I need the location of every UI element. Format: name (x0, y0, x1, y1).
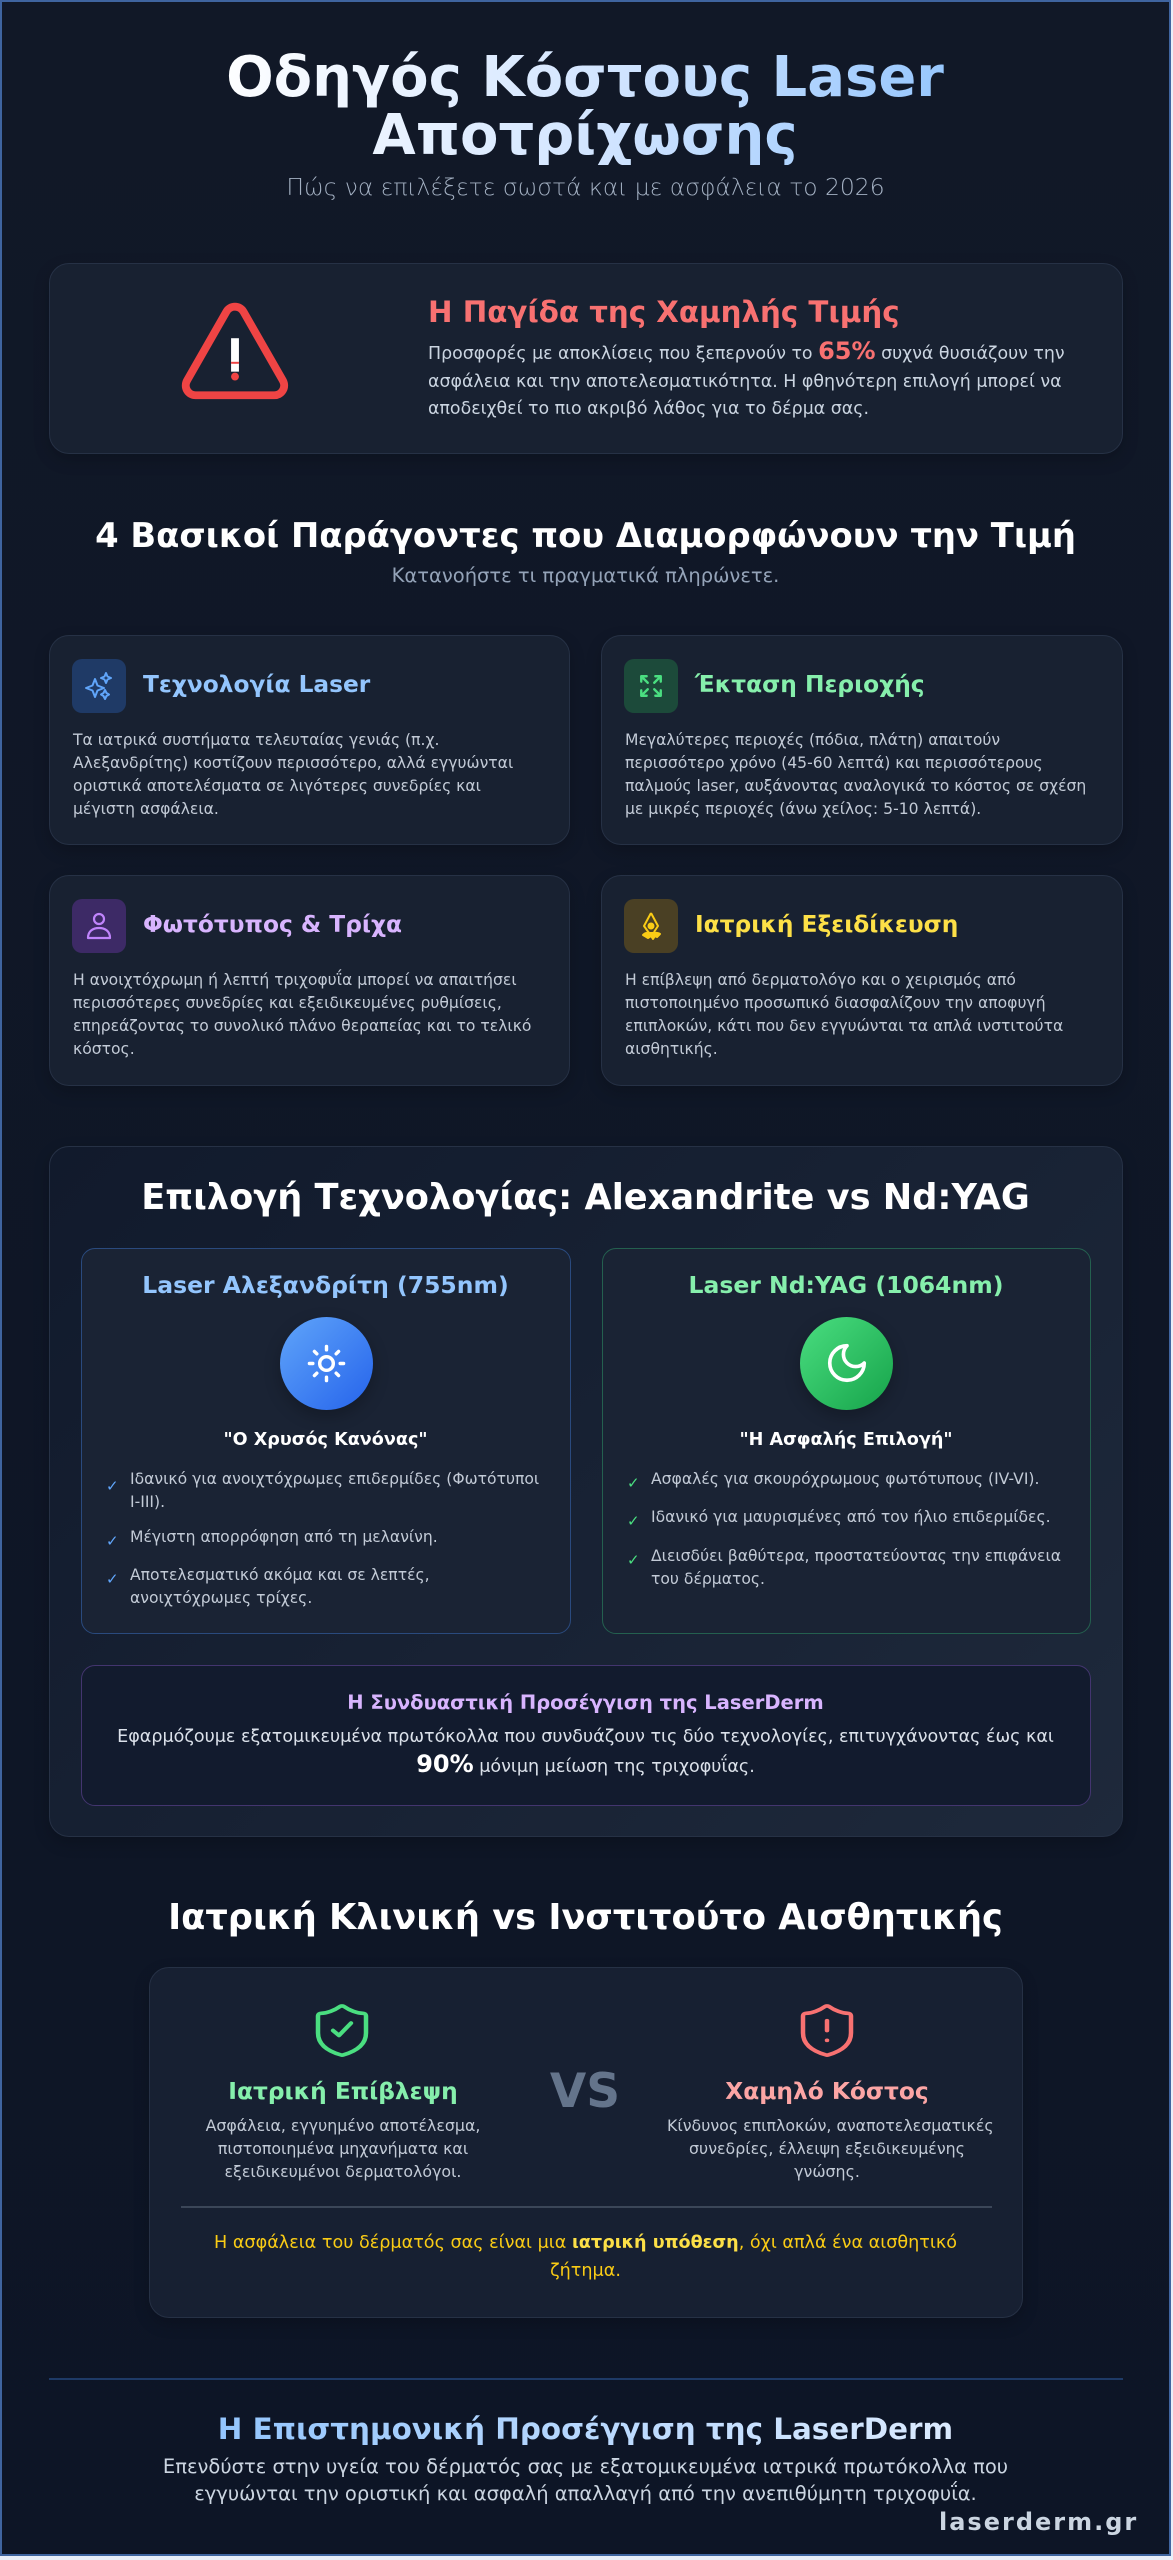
icon: medical flame (624, 899, 678, 953)
list item: ✓ (627, 1474, 640, 1492)
panel: phototype and hair (49, 875, 570, 1086)
text: phototype and hair: Η ανοιχτόχρωμη ή λεπτή τριχοφυΐα μπορεί να απαιτήσει (73, 971, 517, 989)
heading: clinic vs institute: Ιατρική Κλινική vs Ινστιτούτο Αισθητικής (168, 1897, 1003, 1938)
list item (106, 1470, 539, 1511)
text: medical expertise: Η επίβλεψη από δερματολόγο και ο χειρισμός από (625, 971, 1016, 989)
heading: low price trap: Η Παγίδα της Χαμηλής Τιμής (428, 295, 900, 329)
brand url: laserderm.gr (939, 2508, 1138, 2536)
callout: medical matter: Η ασφάλεια του δέρματός σας είναι μια ιατρική υπόθεση, όχι απλά ένα αισθητικό (214, 2233, 957, 2253)
text: treatment area: παλμούς laser, αυξάνοντας αναλογικά το κόστος σε σχέση (625, 777, 1086, 795)
list: alexandrite benefits (106, 1470, 539, 1607)
list item: Αποτελεσματικό ακόμα και σε λεπτές, (130, 1566, 430, 1584)
icon: sun (280, 1317, 373, 1410)
text: laser technology: Τα ιατρικά συστήματα τελευταίας γενιάς (π.χ. (73, 731, 439, 749)
sub-panel: nd:yag (602, 1248, 1091, 1634)
panel: medical expertise (601, 875, 1123, 1086)
text: treatment area: περισσότερο χρόνο (45-60 λεπτά) και περισσότερους (625, 754, 1043, 772)
subtitle: Πώς να επιλέξετε σωστά και με ασφάλεια το 2026 (286, 173, 885, 201)
list item: Ιδανικό για μαυρισμένες από τον ήλιο επιδερμίδες. (651, 1508, 1051, 1526)
icon: moon (800, 1317, 893, 1410)
list item: του δέρματος. (651, 1570, 765, 1588)
text: treatment area: με μικρές περιοχές (άνω χείλος: 5-10 λεπτά). (625, 800, 981, 818)
text: combined approach: 90% μόνιμη μείωση της τριχοφυΐας. (416, 1750, 755, 1778)
title: Οδηγός Κόστους Laser (226, 45, 944, 110)
heading: phototype and hair: Φωτότυπος & Τρίχα (143, 911, 402, 938)
list item: ✓ (627, 1512, 640, 1530)
label: vs: VS (550, 2064, 620, 2119)
panel: technology choice (49, 1146, 1123, 1837)
list item: ✓ (106, 1570, 119, 1588)
callout: medical matter (214, 2233, 957, 2280)
text: phototype and hair: περισσότερες συνεδρίες και εξειδικευμένες ρυθμίσεις, (73, 994, 502, 1012)
list item: ανοιχτόχρωμες τρίχες. (130, 1589, 312, 1607)
text: laser technology: μέγιστη ασφάλεια. (73, 800, 219, 818)
text: low cost: συνεδρίες, έλλειψη εξειδικευμένης (689, 2139, 965, 2158)
footer text: Επενδύστε στην υγεία του δέρματός σας με εξατομικευμένα ιατρικά πρωτόκολλα που (163, 2455, 1008, 2478)
quote: golden rule: "Ο Χρυσός Κανόνας" (223, 1430, 428, 1450)
icon: sparkles (72, 659, 126, 713)
text: combined approach: Εφαρμόζουμε εξατομικευμένα πρωτόκολλα που συνδυάζουν τις δύο τεχνολογίες, επιτυγχάνοντας έως και (117, 1727, 1054, 1747)
text: low cost: γνώσης. (794, 2162, 860, 2181)
heading: alexandrite: Laser Αλεξανδρίτη (755nm) (142, 1271, 509, 1299)
text: low cost (667, 2116, 994, 2181)
heading: medical expertise: Ιατρική Εξειδίκευση (695, 911, 958, 938)
heading: low cost: Χαμηλό Κόστος (725, 2078, 929, 2105)
text: low price trap: αποδειχθεί το πιο ακριβό λάθος για το δέρμα σας. (428, 399, 869, 419)
text: treatment area: Μεγαλύτερες περιοχές (πόδια, πλάτη) απαιτούν (625, 731, 1000, 749)
icon: warning triangle (182, 302, 288, 400)
heading: technology choice: Επιλογή Τεχνολογίας: Alexandrite vs Nd:YAG (141, 1177, 1030, 1218)
footer text: εγγυώνται την οριστική και ασφαλή απαλλαγή από την ανεπιθύμητη τριχοφυΐα. (194, 2482, 977, 2505)
title: Αποτρίχωσης (372, 103, 798, 168)
sub-panel: alexandrite (81, 1248, 571, 1634)
list item: Ιδανικό για ανοιχτόχρωμες επιδερμίδες (Φωτότυποι (130, 1470, 539, 1488)
quote: safe choice: "Η Ασφαλής Επιλογή" (739, 1430, 953, 1450)
panel: laser technology (49, 635, 570, 845)
text: medical expertise: επιπλοκών, κάτι που δεν εγγυώνται τα απλά ινστιτούτα (625, 1017, 1063, 1035)
footer text (163, 2455, 1008, 2505)
text: medical supervision: πιστοποιημένα μηχανήματα και (218, 2139, 468, 2158)
panel: low price trap (49, 263, 1123, 454)
callout: medical matter: ζήτημα. (550, 2260, 621, 2280)
list item: ✓ (627, 1551, 640, 1569)
text: medical expertise: πιστοποιημένο προσωπικό διασφαλίζουν την αποφυγή (625, 994, 1046, 1012)
text: medical expertise: αισθητικής. (625, 1040, 718, 1058)
text: laser technology: Αλεξανδρίτης) κοστίζουν περισσότερο, αλλά εγγυώνται (73, 754, 513, 772)
list item: Διεισδύει βαθύτερα, προστατεύοντας την επιφάνεια (651, 1547, 1061, 1565)
text: medical supervision: εξειδικευμένοι δερματολόγοι. (225, 2162, 461, 2181)
list item: I-III). (130, 1493, 165, 1511)
text: medical supervision (206, 2116, 480, 2181)
text: low cost: Κίνδυνος επιπλοκών, αναποτελεσματικές (667, 2116, 994, 2135)
text: low price trap (428, 337, 1065, 419)
icon: expand arrows (624, 659, 678, 713)
heading: four factors: 4 Βασικοί Παράγοντες που Διαμορφώνουν την Τιμή (95, 516, 1076, 555)
text: laser technology (72, 731, 513, 818)
icon: shield alert (800, 2004, 854, 2057)
list item: ✓ (106, 1532, 119, 1550)
text: medical expertise (625, 971, 1063, 1058)
list item (627, 1547, 1061, 1588)
text: combined approach (117, 1727, 1054, 1778)
list item: ✓ (106, 1477, 119, 1495)
text: phototype and hair (73, 969, 531, 1058)
list item (106, 1566, 430, 1607)
panel: treatment area (601, 635, 1123, 845)
footer heading: Η Επιστημονική Προσέγγιση της LaserDerm (218, 2412, 953, 2446)
text: phototype and hair: επηρεάζοντας το συνολικό πλάνο θεραπείας και το τελικό (73, 1017, 531, 1035)
panel: clinic vs institute comparison (149, 1967, 1023, 2318)
text: medical supervision: Ασφάλεια, εγγυημένο αποτέλεσμα, (206, 2116, 480, 2135)
text: treatment area (625, 731, 1086, 818)
heading: laser technology: Τεχνολογία Laser (143, 671, 370, 698)
list: nd:yag benefits (627, 1470, 1061, 1588)
heading: combined approach: Η Συνδυαστική Προσέγγιση της LaserDerm (347, 1691, 824, 1714)
list item: Ασφαλές για σκουρόχρωμους φωτότυπους (IV-VI). (651, 1470, 1039, 1488)
text: phototype and hair: κόστος. (73, 1040, 135, 1058)
title (215, 49, 955, 165)
subheading: four factors: Κατανοήστε τι πραγματικά πληρώνετε. (392, 564, 779, 587)
callout: combined approach (81, 1665, 1091, 1806)
icon: shield check (316, 2004, 368, 2057)
heading: treatment area: Έκταση Περιοχής (695, 671, 925, 698)
list item: Μέγιστη απορρόφηση από τη μελανίνη. (130, 1528, 438, 1546)
heading: medical supervision: Ιατρική Επίβλεψη (228, 2078, 458, 2105)
icon: person (72, 899, 126, 953)
text: low price trap: Προσφορές με αποκλίσεις που ξεπερνούν το 65% συχνά θυσιάζουν την (428, 337, 1065, 365)
text: low price trap: ασφάλεια και την αποτελεσματικότητα. Η φθηνότερη επιλογή μπορεί να (428, 372, 1062, 392)
heading: nd:yag: Laser Nd:YAG (1064nm) (689, 1271, 1003, 1299)
text: laser technology: οριστικά αποτελέσματα σε λιγότερες συνεδρίες και (73, 777, 481, 795)
